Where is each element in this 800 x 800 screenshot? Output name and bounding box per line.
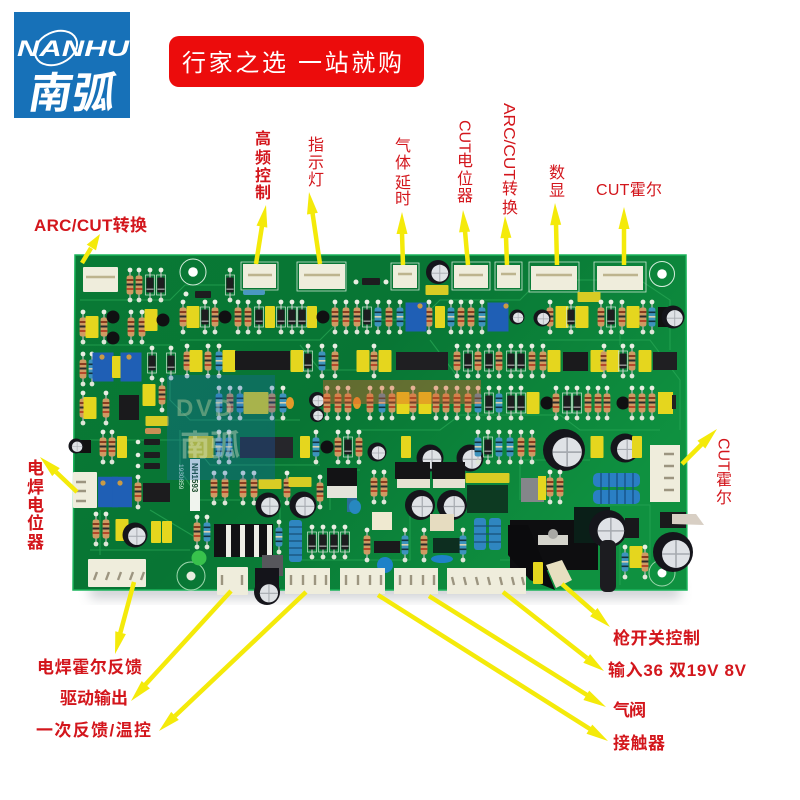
label: ARC/CUT转换 top xyxy=(500,103,518,217)
logo: NANHU 南弧: NANHU xyxy=(17,36,131,61)
label: 数显: 显 xyxy=(549,183,565,200)
board shadow xyxy=(90,584,680,598)
row 2 components xyxy=(180,300,684,334)
bottom and side connectors xyxy=(73,445,680,595)
row 5 components xyxy=(68,429,642,472)
badge: 行家之选 一站就购: 行家之选 一站就购 xyxy=(182,50,402,77)
label: 接触器: 接触器 xyxy=(613,734,665,753)
label: 电焊电位器: 电 xyxy=(27,496,44,515)
label: CUT霍尔 top: CUT霍尔 xyxy=(596,181,662,199)
label: ARC/CUT转换 top: 换 xyxy=(502,199,518,217)
label: CUT电位器: 器 xyxy=(457,187,473,205)
label: CUT霍尔 right: CUT xyxy=(714,438,731,471)
arrow: contactor xyxy=(378,595,608,741)
label: 驱动输出: 驱动输出 xyxy=(60,688,128,708)
arrow: CUT hall top xyxy=(618,207,630,265)
heat sink and center left components xyxy=(211,468,400,576)
label: 气体延时: 时 xyxy=(395,190,411,208)
arrow: indicator xyxy=(307,192,320,264)
label: 气阀: 气阀 xyxy=(613,701,646,720)
arrow: torch switch control xyxy=(562,584,610,627)
left column components xyxy=(80,309,176,469)
arrow: primary feedback xyxy=(159,592,306,731)
watermark overlay xyxy=(167,375,481,480)
label: 一次反馈/温控: 一次反馈/温控 xyxy=(36,721,151,740)
lower left components: 1930859 xyxy=(177,464,184,490)
power section xyxy=(395,462,704,592)
board substrate xyxy=(73,255,687,590)
top connectors xyxy=(83,262,646,292)
label: ARC/CUT转换 top: ARC/CUT xyxy=(500,103,517,180)
logo: NANHU 南弧 xyxy=(14,12,131,118)
label: CUT霍尔 right: 霍 xyxy=(716,472,732,489)
label: 电焊电位器: 焊 xyxy=(27,478,44,497)
arrow: CUT potentiometer xyxy=(459,210,470,265)
label: 电焊电位器: 器 xyxy=(27,533,44,552)
arrow: power input xyxy=(503,592,604,671)
label: 高频控制: 控 xyxy=(255,166,271,185)
row 3 components and integrated circuits xyxy=(184,344,677,378)
label: CUT电位器 xyxy=(455,120,473,205)
logo: NANHU 南弧: 南弧 xyxy=(25,70,120,118)
label: CUT霍尔 right xyxy=(714,438,732,507)
arrow: gas delay xyxy=(396,212,408,265)
label: 高频控制: 制 xyxy=(255,184,271,202)
label: 数显: 数 xyxy=(549,164,565,182)
lower left components: NH1593 xyxy=(190,463,199,493)
arrow: digital display xyxy=(550,203,561,265)
bottom overhanging capacitor xyxy=(254,568,280,605)
arrow: high frequency control xyxy=(256,205,267,264)
label: 电焊电位器: 电 xyxy=(27,459,44,478)
circuit board xyxy=(68,255,704,605)
label: 指示灯: 示 xyxy=(308,155,324,172)
label: CUT电位器: 电 xyxy=(457,152,473,170)
label: 高频控制: 高 xyxy=(255,129,271,148)
lower left components xyxy=(93,459,210,566)
label: CUT电位器: 位 xyxy=(457,170,473,188)
label: 气体延时: 体 xyxy=(395,154,411,172)
label: ARC/CUT转换 top: 转 xyxy=(502,180,518,198)
label: 电焊电位器: 位 xyxy=(27,513,44,533)
label: 电焊霍尔反馈: 电焊霍尔反馈 xyxy=(37,658,142,677)
arrow: ARC/CUT switch left xyxy=(82,234,100,263)
copper traces xyxy=(80,280,680,585)
label: ARC/CUT转换 left: ARC/CUT转换 xyxy=(34,216,147,235)
label: 输入36 双19V 8V: 输入36 双19V 8V xyxy=(608,660,747,680)
badge: 行家之选 一站就购 xyxy=(169,36,424,87)
arrow: gas valve xyxy=(429,596,606,707)
label: 枪开关控制: 枪开关控制 xyxy=(613,628,700,648)
row 1 components xyxy=(127,268,234,302)
arrow: welding potentiometer xyxy=(40,457,77,492)
label: 气体延时: 气 xyxy=(395,137,411,155)
arrow: drive output xyxy=(131,591,231,701)
label: 气体延时: 延 xyxy=(395,174,411,192)
horizontal parts near top edge xyxy=(184,260,600,302)
arrow: ARC/CUT switch top xyxy=(500,216,511,265)
arrow: welding hall feedback xyxy=(115,582,134,654)
label: 指示灯: 灯 xyxy=(308,171,324,189)
label: CUT霍尔 right: 尔 xyxy=(716,489,732,507)
arrow: CUT hall right xyxy=(682,429,717,464)
label: CUT电位器: CUT xyxy=(455,120,472,153)
watermark overlay: DVD xyxy=(176,395,232,422)
mounting holes xyxy=(177,259,675,590)
watermark overlay: 南弧 xyxy=(180,430,240,463)
label: 高频控制: 频 xyxy=(255,149,271,167)
row 4 components xyxy=(216,386,676,422)
label: 指示灯: 指 xyxy=(308,136,324,154)
